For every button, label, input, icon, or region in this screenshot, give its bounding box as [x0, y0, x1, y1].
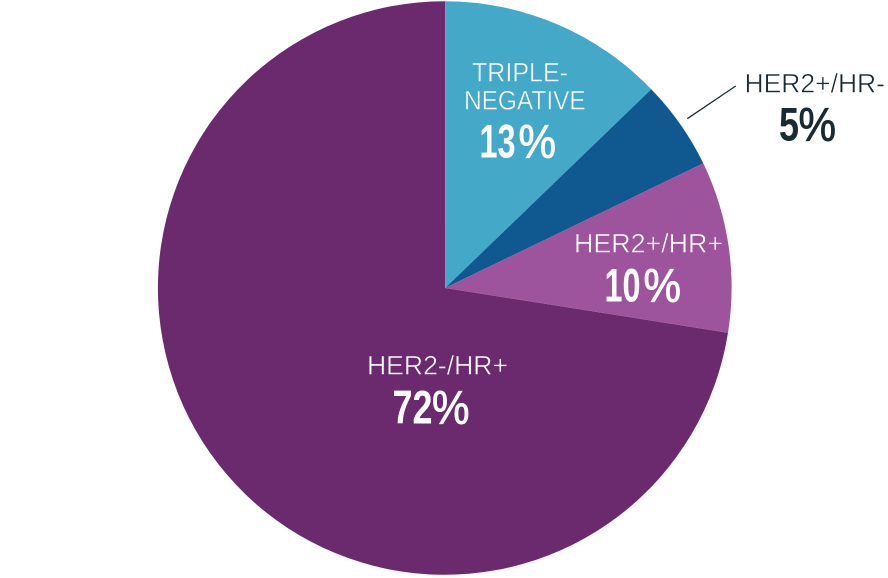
label: triple-negative [464, 57, 586, 168]
label: triple-negative: % [518, 115, 556, 168]
slice: HER2+/HR- 5% [445, 89, 703, 288]
label: HER2-/HR+: 72 [392, 381, 432, 434]
label: triple-negative: 13 [480, 115, 516, 168]
label: HER2-/HR+ [367, 349, 508, 434]
label: HER2-/HR+: % [432, 381, 470, 434]
slice: HER2-/HR+ 72% [158, 1, 728, 575]
label: HER2+/HR+ [574, 228, 723, 313]
slice: triple-negative 13% [445, 1, 651, 288]
label: HER2+/HR-: HER2+/HR- [744, 68, 885, 99]
leader line [687, 86, 736, 119]
label: HER2+/HR+: % [644, 260, 681, 313]
label: HER2-/HR+: HER2-/HR+ [367, 349, 508, 380]
label: triple-negative: TRIPLE- [472, 57, 568, 88]
label: HER2+/HR+: HER2+/HR+ [574, 228, 723, 259]
label: HER2+/HR+: 10 [604, 260, 640, 313]
label: HER2+/HR- [744, 68, 885, 152]
label: HER2+/HR-: 5 [779, 99, 799, 152]
label: triple-negative: NEGATIVE [464, 84, 586, 116]
slice: HER2+/HR+ 10% [445, 163, 732, 333]
label: HER2+/HR-: % [798, 99, 836, 152]
